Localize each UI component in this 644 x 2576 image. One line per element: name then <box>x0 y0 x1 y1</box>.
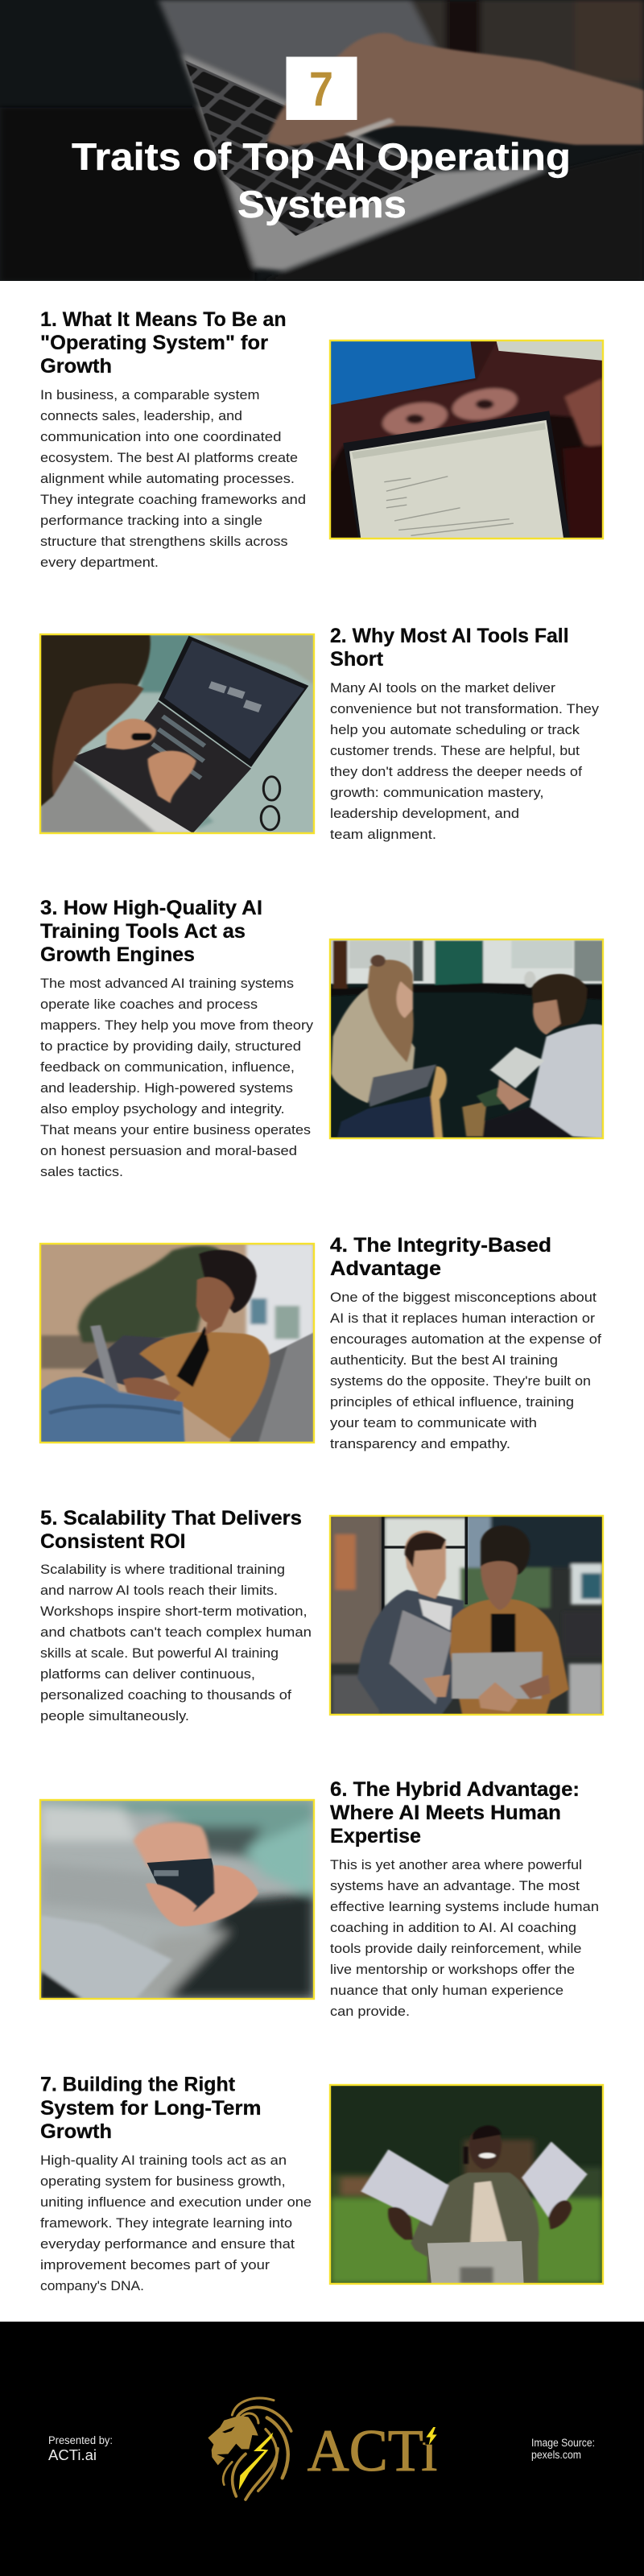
body text 5: people simultaneously. <box>40 1708 189 1724</box>
heading 6: 6. The Hybrid Advantage: <box>330 1778 580 1801</box>
logo: lion head with lightning and ACTi wordmark: ACTi <box>308 2418 437 2484</box>
body text 2: leadership development, and <box>330 806 519 821</box>
heading 1: 1. What It Means To Be an <box>40 308 287 331</box>
photo 5: two colleagues with laptops <box>330 1516 603 1715</box>
photo 3: two colleagues talking <box>330 939 603 1138</box>
body text 4: transparency and empathy. <box>330 1436 510 1451</box>
body text 1: every department. <box>40 555 159 570</box>
body text 3: operate like coaches and process <box>40 997 258 1012</box>
body text 4: AI is that it replaces human interaction or <box>330 1311 595 1326</box>
body text 6: nuance that only human experience <box>330 1983 564 1998</box>
heading 4: Advantage <box>330 1257 441 1280</box>
body text 3: The most advanced AI training systems <box>40 976 294 991</box>
body text 3: sales tactics. <box>40 1164 123 1179</box>
body text 5: skills at scale. But powerful AI training <box>40 1645 279 1661</box>
body text 7: company's DNA. <box>40 2278 144 2293</box>
section 1 <box>40 308 603 570</box>
body text 1: In business, a comparable system <box>40 387 259 402</box>
presented by credit <box>48 2434 113 2463</box>
heading 6: Expertise <box>330 1825 421 1847</box>
body text 5: platforms can deliver continuous, <box>40 1666 255 1682</box>
hero photo: hand on laptop keyboard <box>0 0 644 281</box>
presented by credit: Presented by: <box>48 2434 113 2446</box>
heading 3: Growth Engines <box>40 943 195 966</box>
heading 1 <box>40 308 287 378</box>
title: Systems <box>237 183 407 225</box>
heading 2: Short <box>330 648 384 671</box>
heading 2 <box>330 625 569 671</box>
presented by credit: ACTi.ai <box>48 2447 97 2463</box>
body text 4: One of the biggest misconceptions about <box>330 1290 597 1305</box>
section 5 <box>40 1507 603 1724</box>
body text 1: ecosystem. The best AI platforms create <box>40 450 298 465</box>
body text 2: convenience but not transformation. They <box>330 701 600 716</box>
logo: lion head with lightning and ACTi wordmark <box>208 2398 439 2500</box>
footer <box>0 2322 644 2576</box>
photo 2: man typing on laptop <box>40 634 314 833</box>
header banner <box>0 0 644 281</box>
body text 5: and narrow AI tools reach their limits. <box>40 1583 278 1598</box>
body text 7: uniting influence and execution under one <box>40 2194 312 2210</box>
body text 4: your team to communicate with <box>330 1415 537 1430</box>
body text 2: they don't address the deeper needs of <box>330 764 582 779</box>
image source credit: Image Source: <box>531 2437 595 2449</box>
heading 5 <box>40 1507 302 1553</box>
photo 4: woman on sofa with laptop <box>40 1244 314 1443</box>
body text 4: systems do the opposite. They're built on <box>330 1373 591 1389</box>
heading 7 <box>40 2074 261 2143</box>
body text 5: Workshops inspire short-term motivation, <box>40 1604 308 1619</box>
body text 6: tools provide daily reinforcement, while <box>330 1941 581 1956</box>
heading 2: 2. Why Most AI Tools Fall <box>330 625 569 647</box>
body text 2: customer trends. These are helpful, but <box>330 743 580 758</box>
body text 1 <box>40 387 306 570</box>
body text 3: and leadership. High-powered systems <box>40 1080 293 1096</box>
body text 5 <box>40 1562 312 1724</box>
body text 1: performance tracking into a single <box>40 513 262 528</box>
number badge: 7 <box>309 62 333 116</box>
heading 7: 7. Building the Right <box>40 2074 236 2096</box>
body text 7 <box>40 2153 312 2293</box>
body text 1: They integrate coaching frameworks and <box>40 492 306 507</box>
body text 1: connects sales, leadership, and <box>40 408 242 423</box>
heading 4: 4. The Integrity-Based <box>330 1234 551 1257</box>
body text 1: alignment while automating processes. <box>40 471 295 486</box>
heading 6 <box>330 1778 580 1847</box>
section 7 <box>40 2074 603 2293</box>
body text 2: help you automate scheduling or track <box>330 722 580 737</box>
image source credit <box>531 2437 595 2461</box>
body text 5: and chatbots can't teach complex human <box>40 1624 312 1640</box>
body text 5: Scalability is where traditional training <box>40 1562 285 1577</box>
body text 5: personalized coaching to thousands of <box>40 1687 291 1703</box>
heading 4 <box>330 1234 551 1280</box>
heading 7: Growth <box>40 2120 112 2143</box>
body text 2 <box>330 680 600 842</box>
body text 2: growth: communication mastery, <box>330 785 544 800</box>
heading 3: 3. How High-Quality AI <box>40 897 262 919</box>
body text 7: framework. They integrate learning into <box>40 2215 292 2231</box>
body text 1: structure that strengthens skills across <box>40 534 288 549</box>
heading 3: Training Tools Act as <box>40 920 246 943</box>
section 6 <box>40 1778 599 2019</box>
body text 2: Many AI tools on the market deliver <box>330 680 555 696</box>
title <box>72 135 571 225</box>
body text 6: can provide. <box>330 2004 410 2019</box>
body text 1: communication into one coordinated <box>40 429 282 444</box>
body text 6: This is yet another area where powerful <box>330 1857 582 1872</box>
heading 7: System for Long-Term <box>40 2097 261 2120</box>
heading 5: 5. Scalability That Delivers <box>40 1507 302 1530</box>
body text 3: to practice by providing daily, structured <box>40 1038 301 1054</box>
body text 3 <box>40 976 314 1179</box>
heading 6: Where AI Meets Human <box>330 1802 561 1824</box>
body text 3: on honest persuasion and moral-based <box>40 1143 297 1158</box>
body text 7: operating system for business growth, <box>40 2174 286 2189</box>
heading 1: "Operating System" for <box>40 332 268 354</box>
photo 6: hands holding smartphone <box>40 1800 314 1999</box>
body text 7: everyday performance and ensure that <box>40 2236 295 2252</box>
section 2 <box>40 625 600 842</box>
body text 2: team alignment. <box>330 827 436 842</box>
section 3 <box>40 897 603 1179</box>
lion head <box>208 2416 258 2465</box>
number badge <box>287 56 357 120</box>
body text 4: encourages automation at the expense of <box>330 1331 601 1347</box>
body text 3: feedback on communication, influence, <box>40 1059 295 1075</box>
body text 3: mappers. They help you move from theory <box>40 1018 314 1033</box>
body text 4: authenticity. But the best AI training <box>330 1352 558 1368</box>
photo 7: smiling man with papers and laptop <box>330 2085 603 2284</box>
heading 5: Consistent ROI <box>40 1530 186 1553</box>
body text 6: coaching in addition to AI. AI coaching <box>330 1920 576 1935</box>
title: Traits of Top AI Operating <box>72 135 571 178</box>
body text 6: live mentorship or workshops offer the <box>330 1962 575 1977</box>
photo 1: laptop with code <box>330 341 603 539</box>
body text 4: principles of ethical influence, training <box>330 1394 574 1410</box>
image source credit: pexels.com <box>531 2449 581 2461</box>
body text 6: systems have an advantage. The most <box>330 1878 580 1893</box>
body text 3: also employ psychology and integrity. <box>40 1101 285 1117</box>
heading 3 <box>40 897 262 966</box>
section 4 <box>40 1234 601 1451</box>
body text 7: High-quality AI training tools act as an <box>40 2153 287 2168</box>
body text 3: That means your entire business operates <box>40 1122 311 1137</box>
body text 6 <box>330 1857 599 2019</box>
body text 7: improvement becomes part of your <box>40 2257 270 2273</box>
body text 4 <box>330 1290 601 1451</box>
heading 1: Growth <box>40 355 112 378</box>
body text 6: effective learning systems include human <box>330 1899 599 1914</box>
